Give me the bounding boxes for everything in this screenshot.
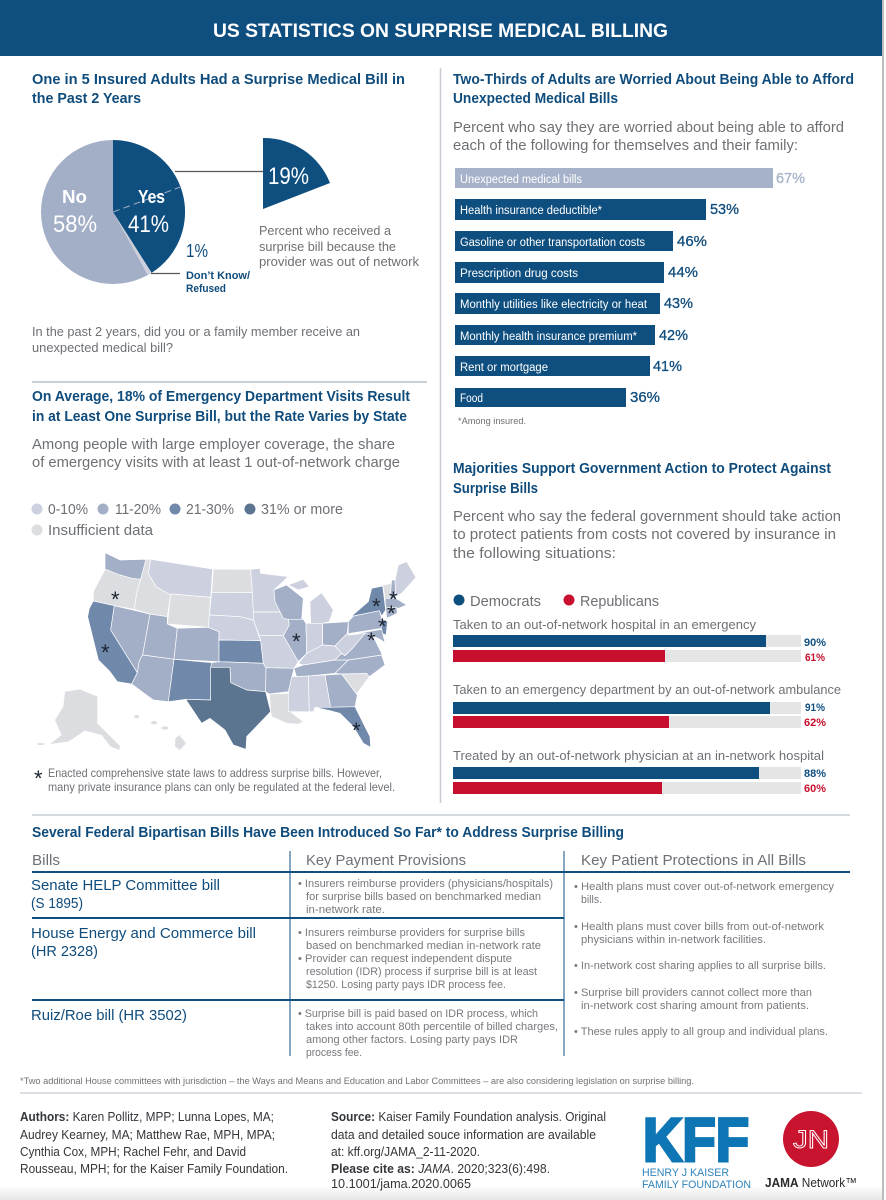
key payment provisions: takes into account 80th percentile of billed charges, xyxy=(306,1021,558,1033)
table column headers xyxy=(32,852,806,869)
map subtitle xyxy=(32,436,400,471)
paired bars: out-of-network hospital: 61% xyxy=(805,652,825,664)
bill names xyxy=(31,877,256,1024)
key payment provisions: in-network rate. xyxy=(306,904,385,916)
source and citation: at: kff.org/JAMA_2-11-2020. xyxy=(331,1145,480,1159)
key patient protections: • In-network cost sharing applies to all surprise bills. xyxy=(574,960,826,972)
key patient protections: • Health plans must cover out-of-network emergency xyxy=(574,881,834,893)
heading: two-thirds of adults worried: Unexpected Medical Bills xyxy=(453,91,618,107)
callout: 19% out of network wedge: surprise bill because the xyxy=(259,239,396,254)
pie chart: surprise bill received: 1% xyxy=(186,241,208,261)
key patient protections: • Surprise bill providers cannot collect more than xyxy=(574,987,812,999)
key patient protections: bills. xyxy=(581,894,602,906)
bar chart: worries about affording: 53% xyxy=(710,201,739,218)
map footnote: * xyxy=(34,766,43,791)
table column headers: Key Payment Provisions xyxy=(306,852,466,869)
bar chart: worries about affording: Gasoline or other transportation costs xyxy=(460,237,645,249)
pie chart: surprise bill received: 58% xyxy=(53,211,97,238)
pie chart: surprise bill received: Don’t Know/ xyxy=(186,270,250,282)
source and citation: Please cite as: JAMA. 2020;323(6):498. xyxy=(331,1162,550,1176)
key payment provisions: • Insurers reimburse providers for surprise bills xyxy=(298,927,525,939)
map footnote xyxy=(34,766,395,794)
table footnote: *Two additional House committees with jurisdiction – the Ways and Means and Education and Labor Committees – are also considering legislation on surprise billing. xyxy=(20,1076,694,1087)
paired bars: out-of-network ambulance: Taken to an emergency department by an out-of-network ambulance xyxy=(453,682,841,697)
bar chart: worries about affording: Food xyxy=(460,393,483,405)
source and citation: Source: Kaiser Family Foundation analysis. Original xyxy=(331,1110,606,1124)
key payment provisions: • Provider can request independent dispute xyxy=(298,953,512,965)
key payment provisions: $1250. Losing party pays IDR process fee. xyxy=(306,979,506,991)
heading: one in 5 insured adults: One in 5 Insured Adults Had a Surprise Medical Bill in xyxy=(32,72,405,88)
bar chart: worries about affording: 43% xyxy=(664,295,693,312)
pie chart: surprise bill received: No xyxy=(62,187,87,207)
partisan chart subtitle: Percent who say the federal government should take action xyxy=(453,508,841,525)
partisan chart subtitle: to protect patients from costs not covered by insurance in xyxy=(453,526,836,543)
US choropleth map: * xyxy=(111,587,120,612)
key payment provisions: for surprise bills based on benchmarked median xyxy=(306,891,541,903)
bar chart: worries about affording: Monthly utilities like electricity or heat xyxy=(460,299,648,311)
paired bars: out-of-network physician xyxy=(453,748,826,795)
logo: KFF: HENRY J KAISER xyxy=(642,1167,729,1179)
bar chart: worries about affording: Rent or mortgage xyxy=(460,362,548,374)
logo: JAMA Network: JAMA Network™ xyxy=(765,1175,857,1190)
key payment provisions: based on benchmarked median in-network rate xyxy=(306,940,541,952)
pie chart: surprise bill received: Refused xyxy=(186,283,226,295)
logo: JAMA Network: JN xyxy=(793,1126,829,1154)
pie question text xyxy=(32,324,360,355)
callout: 19% out of network wedge: 19% xyxy=(268,163,309,190)
heading: two-thirds of adults worried xyxy=(453,72,854,107)
map legend: Insufficient data xyxy=(48,522,154,539)
paired bars: out-of-network hospital: 90% xyxy=(804,637,826,649)
bar chart: worries about affording: 42% xyxy=(659,327,688,344)
heading: majorities support government action: Majorities Support Government Action to Protect Against xyxy=(453,461,831,477)
logo: KFF: FAMILY FOUNDATION xyxy=(642,1179,751,1191)
authors xyxy=(20,1110,288,1176)
paired bars: out-of-network hospital: Taken to an out-of-network hospital in an emergency xyxy=(453,617,756,632)
US choropleth map xyxy=(37,553,416,750)
table column headers: Bills xyxy=(32,852,60,869)
paired bars: out-of-network ambulance: 62% xyxy=(804,717,826,729)
map legend: 31% or more xyxy=(261,501,343,518)
heading: one in 5 insured adults xyxy=(32,72,405,107)
key patient protections: • These rules apply to all group and individual plans. xyxy=(574,1026,828,1038)
pie chart: surprise bill received: 41% xyxy=(128,211,169,238)
heading: emergency department visits xyxy=(32,389,410,425)
authors: Cynthia Cox, MPH; Rachel Fehr, and David xyxy=(20,1145,246,1159)
key patient protections: • Health plans must cover bills from out-of-network xyxy=(574,921,824,933)
pie chart: surprise bill received xyxy=(41,140,250,295)
US choropleth map: * xyxy=(389,587,398,612)
partisan chart subtitle: the following situations: xyxy=(453,545,616,562)
heading: majorities support government action xyxy=(453,461,831,497)
paired bars: out-of-network physician: 60% xyxy=(804,783,826,795)
partisan chart subtitle xyxy=(453,508,841,562)
source and citation: data and detailed souce information are available xyxy=(331,1128,596,1142)
bill names: House Energy and Commerce bill xyxy=(31,925,256,942)
bar chart: worries about affording: 44% xyxy=(668,264,698,281)
paired bars: out-of-network physician: 88% xyxy=(804,768,826,780)
US choropleth map: * xyxy=(352,718,361,743)
map footnote: Enacted comprehensive state laws to address surprise bills. However, xyxy=(48,766,382,780)
title banner: US STATISTICS ON SURPRISE MEDICAL BILLING xyxy=(213,21,668,42)
key patient protections: in-network cost sharing amount from patients. xyxy=(581,1000,809,1012)
US choropleth map: * xyxy=(292,629,301,654)
bill names: Senate HELP Committee bill xyxy=(31,877,220,894)
key payment provisions: among other factors. Losing party pays IDR xyxy=(306,1034,518,1046)
heading: emergency department visits: On Average, 18% of Emergency Department Visits Result xyxy=(32,389,410,405)
key patient protections xyxy=(574,881,834,1038)
bar chart subtitle: Percent who say they are worried about being able to afford xyxy=(453,119,844,136)
key payment provisions: • Surprise bill is paid based on IDR process, which xyxy=(298,1008,538,1020)
map footnote: many private insurance plans can only be regulated at the federal level. xyxy=(48,780,395,794)
bar chart: worries about affording: 46% xyxy=(677,233,707,250)
bill names: (S 1895) xyxy=(31,895,83,912)
authors: Rousseau, MPH; for the Kaiser Family Foundation. xyxy=(20,1162,288,1176)
authors: Authors: Karen Pollitz, MPP; Lunna Lopes, MA; xyxy=(20,1110,274,1124)
US choropleth map: * xyxy=(378,614,387,639)
source and citation xyxy=(331,1110,606,1191)
source and citation: 10.1001/jama.2020.0065 xyxy=(331,1177,471,1191)
bar chart: worries about affording: 41% xyxy=(653,358,682,375)
callout: 19% out of network wedge: provider was out of network xyxy=(259,254,419,269)
heading: one in 5 insured adults: the Past 2 Years xyxy=(32,91,141,107)
bill names: (HR 2328) xyxy=(31,943,98,960)
bar chart: worries about affording: *Among insured. xyxy=(458,416,526,427)
key payment provisions: process fee. xyxy=(306,1047,362,1059)
paired bars: out-of-network hospital xyxy=(453,617,826,664)
heading: majorities support government action: Surprise Bills xyxy=(453,481,538,497)
bar chart: worries about affording: Health insurance deductible* xyxy=(460,205,603,217)
bar chart: worries about affording xyxy=(455,168,805,427)
party legend: Republicans xyxy=(580,593,659,610)
heading: emergency department visits: in at Least One Surprise Bill, but the Rate Varies by State xyxy=(32,409,407,425)
map subtitle: Among people with large employer coverage, the share xyxy=(32,436,395,453)
map legend: 0-10% xyxy=(48,501,88,518)
authors: Audrey Kearney, MA; Matthew Rae, MPH, MPA; xyxy=(20,1128,275,1142)
party legend: Democrats xyxy=(470,593,541,610)
key payment provisions: • Insurers reimburse providers (physicians/hospitals) xyxy=(298,878,553,890)
key patient protections: physicians within in-network facilities. xyxy=(581,934,766,946)
map subtitle: of emergency visits with at least 1 out-of-network charge xyxy=(32,454,400,471)
map legend xyxy=(32,501,343,539)
callout: 19% out of network wedge: Percent who received a xyxy=(259,223,392,238)
callout: 19% out of network wedge xyxy=(175,138,419,269)
bill names: Ruiz/Roe bill (HR 3502) xyxy=(31,1007,187,1024)
bar chart: worries about affording: Monthly health insurance premium* xyxy=(460,331,638,343)
heading: two-thirds of adults worried: Two-Thirds of Adults are Worried About Being Able to Afford xyxy=(453,72,854,88)
party legend xyxy=(454,593,659,610)
paired bars: out-of-network ambulance xyxy=(453,682,841,729)
table of bills xyxy=(31,851,850,1059)
logo: JAMA Network xyxy=(765,1111,857,1190)
US choropleth map: * xyxy=(372,594,381,619)
logo: KFF: KFF xyxy=(643,1106,749,1174)
bar chart: worries about affording: 36% xyxy=(630,389,660,406)
pie question text: unexpected medical bill? xyxy=(32,340,173,355)
bar chart: worries about affording: Unexpected medical bills xyxy=(460,174,582,186)
title banner xyxy=(0,0,882,56)
US choropleth map: * xyxy=(101,640,110,665)
pie chart: surprise bill received: Yes xyxy=(138,187,165,207)
bar chart subtitle: each of the following for themselves and their family: xyxy=(453,137,798,154)
pie question text: In the past 2 years, did you or a family member receive an xyxy=(32,324,360,339)
map legend: 21-30% xyxy=(186,501,234,518)
US choropleth map: * xyxy=(367,628,376,653)
bar chart: worries about affording: Prescription drug costs xyxy=(460,268,578,280)
map legend: 11-20% xyxy=(115,501,161,518)
table column headers: Key Patient Protections in All Bills xyxy=(581,852,806,869)
paired bars: out-of-network physician: Treated by an out-of-network physician at an in-network hospital xyxy=(453,748,824,763)
bar chart: worries about affording: 67% xyxy=(776,170,805,187)
US choropleth map: * xyxy=(387,601,396,626)
paired bars: out-of-network ambulance: 91% xyxy=(805,702,825,714)
key payment provisions xyxy=(298,878,558,1059)
heading: federal bipartisan bills: Several Federal Bipartisan Bills Have Been Introduced So Far* to Address Surprise Billing xyxy=(32,825,624,841)
bar chart subtitle xyxy=(453,119,844,154)
key payment provisions: resolution (IDR) process if surprise bill is at least xyxy=(306,966,537,978)
